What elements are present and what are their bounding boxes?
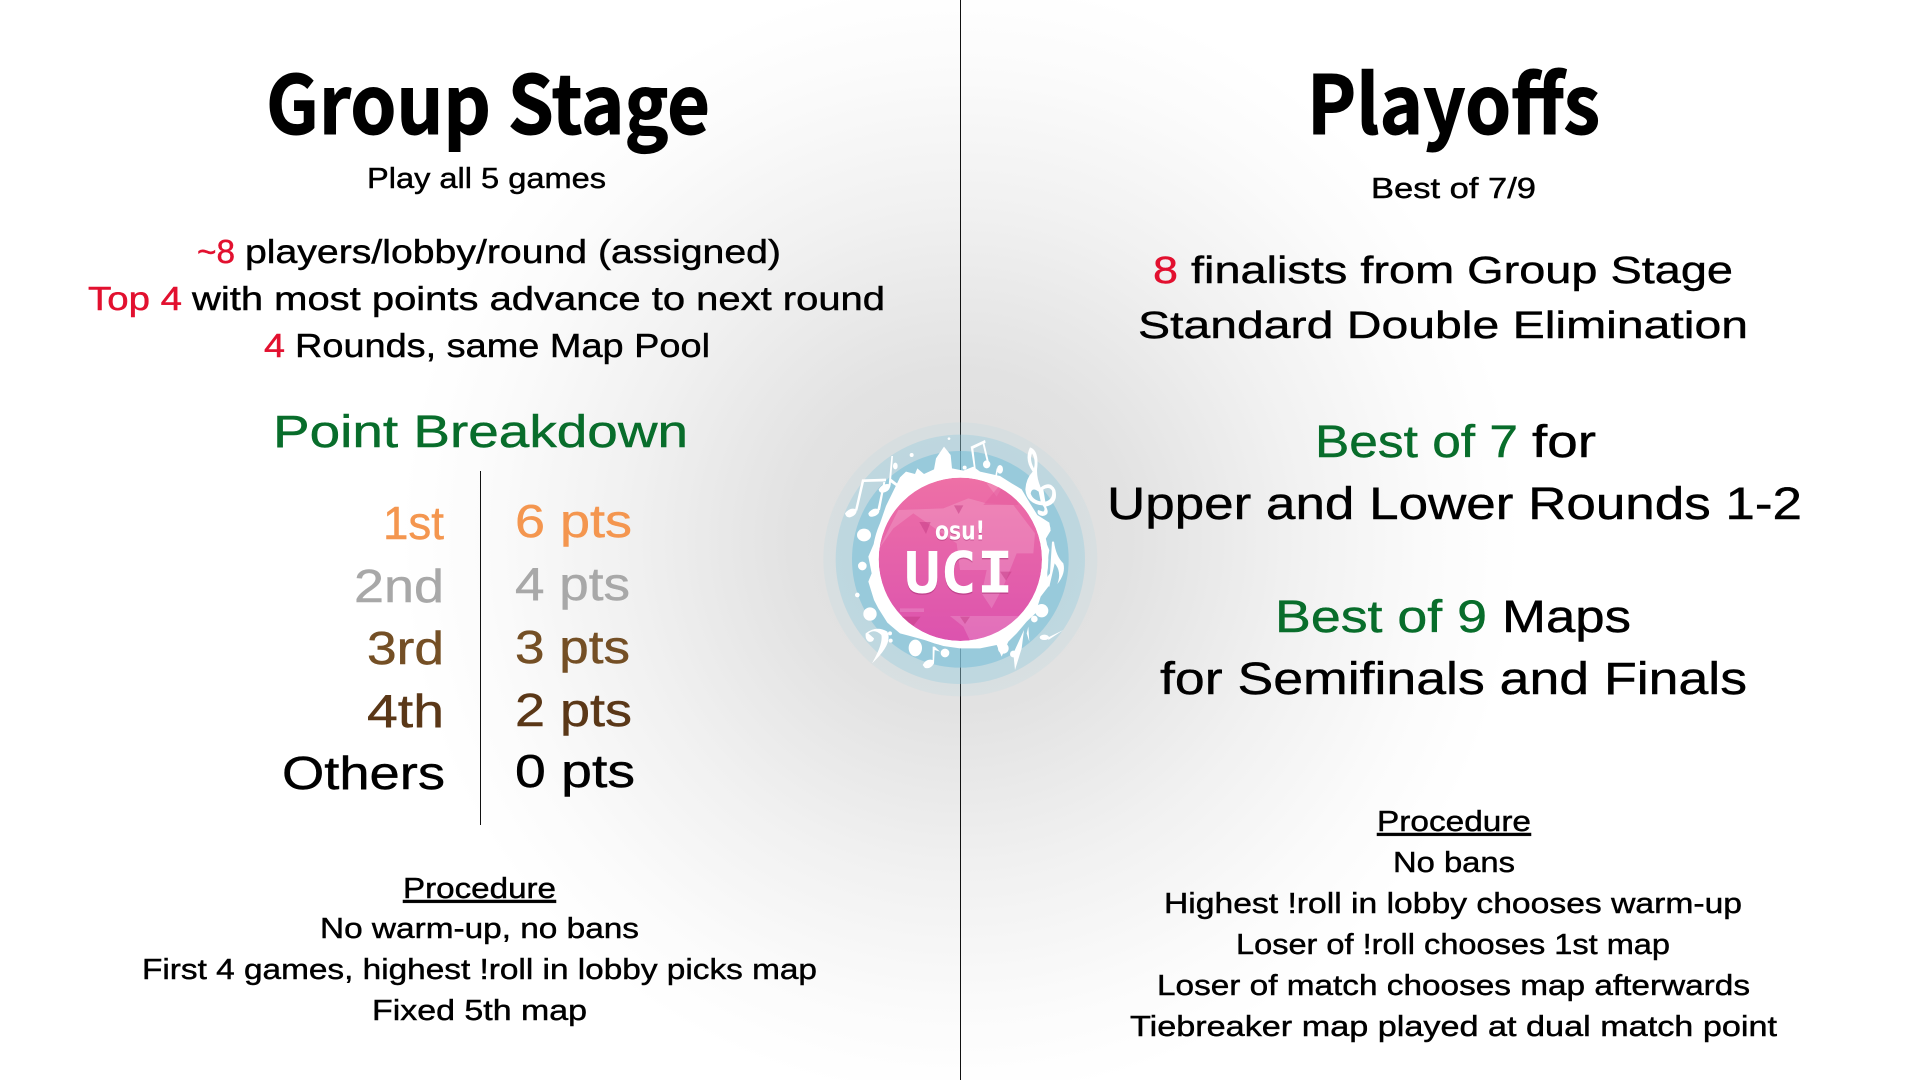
note bottom [923,647,940,668]
table: point breakdown: Others [282,747,445,799]
text block: group stage procedure: Fixed 5th map [372,995,587,1027]
text block: playoffs procedure: Procedure [1377,806,1531,838]
text block: best of 7: for [1532,416,1596,467]
heading: Group Stage: Group Stage [266,41,710,158]
text block: best of 7: Upper and Lower Rounds 1-2 [1107,478,1802,529]
text block: best of 9 [1160,591,1747,704]
bottom right strokes [1013,627,1029,670]
beamed notes top left [845,509,879,517]
text block: group stage format: ~8 [197,233,235,270]
text block: playoffs procedure: Highest !roll in lobby chooses warm-up [1164,888,1742,920]
panel: playoffs [1107,41,1802,1043]
subheading: best of 7/9: Best of 7/9 [1371,173,1536,205]
pink badge [878,475,1042,641]
bass clef [866,629,889,663]
beamed notes top centre [971,440,989,468]
table: point breakdown: 4 pts [515,558,630,610]
text block: group stage procedure [142,873,817,1027]
heading: Playoffs: Playoffs [1307,41,1600,158]
eighth note right [1045,542,1064,587]
icon: white ink splash and music notes [845,437,1064,670]
table: point breakdown: 6 pts [515,495,632,547]
logo: osu! UCI [823,422,1097,696]
panel: group stage [88,41,885,1027]
text block: group stage procedure: First 4 games, highest !roll in lobby picks map [142,954,817,986]
text block: finalists and format: finalists from Group Stage [1191,250,1733,292]
text block: finalists and format: Standard Double Elimination [1138,305,1748,347]
table: point breakdown: 0 pts [515,745,635,797]
text block: best of 9: Best of 9 [1275,591,1487,642]
table: point breakdown: 4th [367,685,444,737]
text: UCI: UCI [904,540,1013,606]
table: point breakdown [282,471,635,825]
text block: group stage format: players/lobby/round (assigned) [245,233,781,270]
glow rings [823,422,1097,696]
text block: playoffs procedure: Loser of !roll chooses 1st map [1236,929,1670,961]
text block: finalists and format: 8 [1153,250,1178,292]
text block: playoffs procedure [1130,806,1777,1043]
text block: group stage format: 4 [264,327,285,364]
text block: playoffs procedure: Loser of match chooses map afterwards [1157,970,1750,1002]
text block: best of 7: Best of 7 [1315,416,1518,467]
text block: playoffs procedure: Tiebreaker map played at dual match point [1130,1011,1777,1043]
text block: group stage format: Top 4 [88,280,182,317]
text block: group stage procedure: No warm-up, no bans [320,913,639,945]
text block: finalists and format [1138,250,1748,347]
text: osu!: osu! [935,515,985,545]
text block: group stage format: with most points advance to next round [191,280,885,317]
text block: group stage procedure: Procedure [403,873,556,905]
table: point breakdown: 2nd [354,560,444,612]
text block: best of 9: for Semifinals and Finals [1160,653,1747,704]
treble clef [1025,447,1056,516]
table: point breakdown: 3rd [367,622,444,674]
table: point breakdown: 3 pts [515,621,630,673]
text block: playoffs procedure: No bans [1393,847,1515,879]
text block: best of 9: Maps [1502,591,1631,642]
text block: group stage format: Rounds, same Map Pool [295,327,710,364]
heading: Point Breakdown: Point Breakdown [273,406,688,457]
text block: group stage format [88,233,885,364]
text block: best of 7 [1107,416,1802,529]
subheading: play all 5 games: Play all 5 games [367,163,606,195]
table: point breakdown: 1st [383,497,444,549]
table: point breakdown: 2 pts [515,684,632,736]
